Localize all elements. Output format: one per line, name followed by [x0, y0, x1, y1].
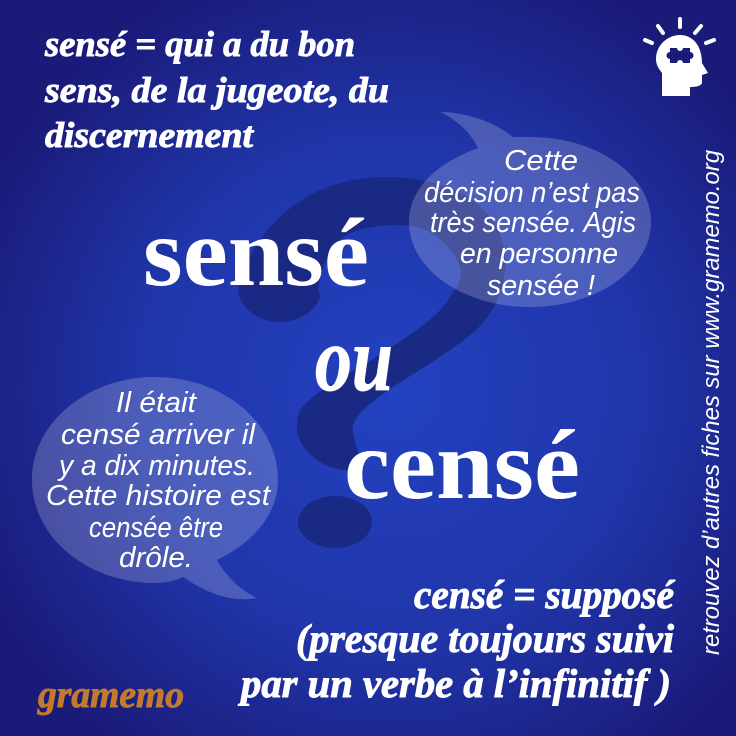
definition: sensé: sens, de la jugeote, du: [44, 70, 389, 110]
heading: ou: ou: [315, 308, 393, 410]
text: left bubble example: censé arriver il: [61, 419, 257, 451]
definition: censé: [238, 572, 675, 706]
icon: head with puzzle piece: [645, 19, 714, 96]
text: left bubble example: Cette histoire est: [46, 480, 272, 512]
text: top bubble example: en personne: [460, 238, 618, 270]
text: left bubble example: drôle.: [119, 542, 193, 574]
speech bubble: bottom left: [32, 377, 278, 599]
text: left bubble example: censée être: [89, 512, 223, 544]
heading: censé: censé: [344, 409, 580, 520]
text: top bubble example: décision n’est pas: [424, 177, 640, 209]
definition: censé: censé = supposé: [414, 572, 675, 617]
heading: sensé: sensé: [143, 199, 369, 307]
logo: gramemo: gramemo: [37, 674, 184, 716]
definition: censé: par un verbe à l’infinitif ): [238, 661, 671, 706]
icon: question mark: [238, 177, 505, 548]
definition: sensé: [44, 24, 389, 155]
definition: sensé: sensé = qui a du bon: [44, 24, 355, 64]
vertical website note: retrouvez d’autres fiches sur www.gramemo.org: [698, 149, 725, 655]
text: left bubble example: y a dix minutes.: [57, 450, 255, 482]
text: left bubble example: Il était: [116, 387, 198, 419]
text: top bubble example: très sensée. Agis: [430, 207, 636, 239]
text: left bubble example: [46, 387, 272, 574]
text: top bubble example: sensée !: [487, 270, 595, 302]
definition: censé: (presque toujours suivi: [296, 616, 674, 661]
definition: sensé: discernement: [45, 115, 254, 155]
speech bubble: top right: [409, 112, 651, 307]
text: top bubble example: Cette: [504, 145, 578, 177]
text: top bubble example: [424, 145, 640, 302]
